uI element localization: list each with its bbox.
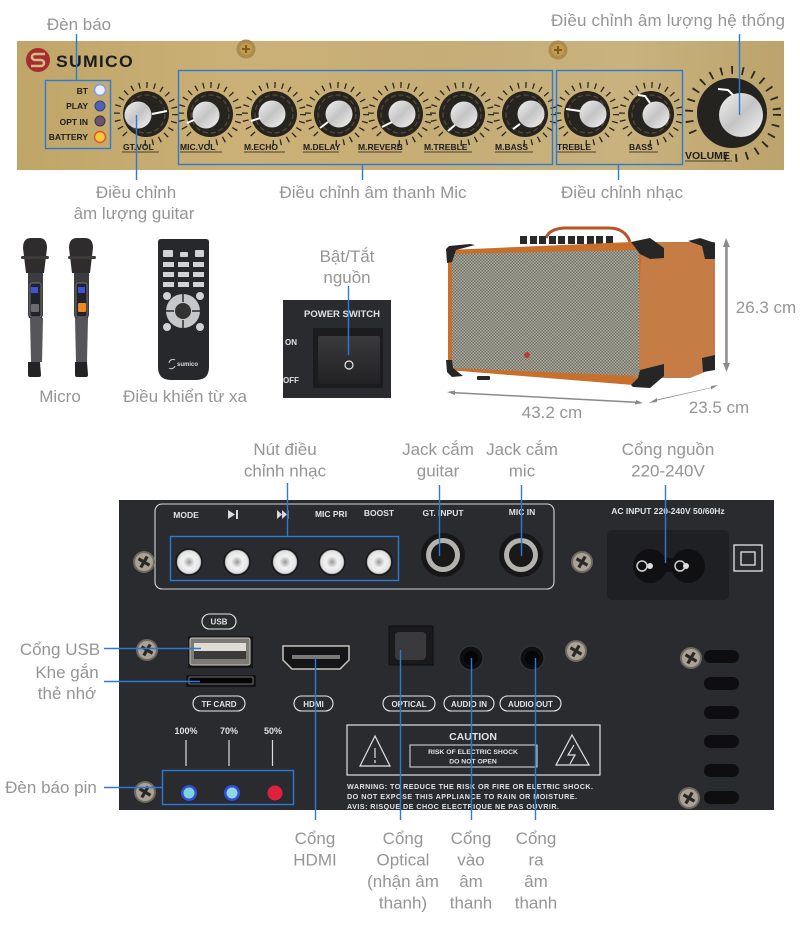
label: power port: 220-240V	[631, 462, 706, 480]
HDMI tag	[294, 696, 333, 711]
knob: GT.VOL: GT.VOL	[123, 142, 154, 152]
caution box	[347, 725, 600, 775]
label: optical: thanh)	[379, 894, 427, 912]
image: remote control	[158, 239, 209, 380]
jack: mic input	[499, 533, 543, 577]
callout lines: rear panel	[104, 483, 666, 820]
label: music: Điều chỉnh nhạc	[561, 183, 683, 202]
knob: BASS	[622, 85, 680, 152]
label: battery lights: Đèn báo pin	[5, 778, 97, 797]
TF CARD tag: TF CARD	[201, 700, 237, 709]
label: guitar jack: guitar	[417, 462, 460, 480]
indicator lights: BATTERY	[49, 132, 88, 142]
label: optical: (nhận âm	[367, 872, 439, 891]
callout boxes: top strip	[46, 34, 740, 180]
knob: TREBLE	[557, 85, 616, 152]
label: music buttons: chỉnh nhạc	[244, 462, 327, 480]
image: power switch: OFF	[283, 376, 299, 385]
label: audio out: Cổng	[516, 829, 556, 848]
panel: top control strip	[17, 40, 784, 170]
label: USB port: Cổng USB	[20, 640, 100, 659]
input labels: MODE	[173, 510, 199, 520]
dimension arrows	[447, 238, 730, 404]
battery levels: 50%	[264, 726, 282, 736]
label: depth: 23.5 cm	[689, 398, 749, 417]
label: height: 26.3 cm	[736, 298, 796, 317]
label: micro: Micro	[39, 387, 81, 406]
warning text: WARNING: TO REDUCE THE RISK OR FIRE OR ELETRIC SHOCK.	[347, 782, 593, 791]
label: audio out: thanh	[515, 894, 557, 912]
indicator lights: PLAY	[66, 101, 88, 111]
battery levels	[174, 726, 282, 801]
knob: M.TREBLE	[424, 85, 491, 152]
knob: BASS: BASS	[629, 142, 653, 152]
screws	[133, 551, 702, 809]
label: mic sound: Điều chỉnh âm thanh Mic	[279, 183, 467, 202]
caution box: RISK OF ELECTRIC SHOCK	[428, 749, 518, 756]
buttons	[176, 549, 392, 575]
input labels: MIC IN	[509, 507, 535, 517]
TF CARD tag	[193, 696, 245, 711]
battery levels: 70%	[220, 726, 238, 736]
indicator lights: BT	[77, 86, 89, 96]
image: microphones	[21, 238, 96, 377]
label: audio out: âm	[524, 872, 548, 891]
warning text: AVIS: RISQUE DE CHOC ELECTRIQUE NE PAS OUVRIR.	[347, 802, 559, 811]
image: orange speaker	[446, 228, 715, 388]
knob: VOLUME: VOLUME	[685, 150, 730, 162]
label: memory card slot: Khe gắn	[35, 663, 99, 682]
knob: M.TREBLE: M.TREBLE	[424, 142, 468, 152]
AUDIO OUT tag: AUDIO OUT	[508, 700, 553, 709]
caution box: CAUTION	[449, 731, 497, 743]
optical port	[389, 626, 433, 665]
label: music buttons: Nút điều	[253, 440, 317, 459]
label: indicator lights: Đèn báo	[47, 15, 111, 34]
image: power switch: POWER SWITCH	[304, 309, 380, 320]
knob: VOLUME	[685, 70, 777, 162]
knob: MIC.VOL: MIC.VOL	[180, 142, 215, 152]
label: audio out: ra	[528, 850, 544, 870]
label: HDMI: Cổng	[295, 829, 335, 848]
label: guitar volume: âm lượng guitar	[74, 204, 195, 223]
logo: Sumico	[26, 48, 134, 72]
label: audio in: vào	[457, 850, 485, 870]
label: power port: Cổng nguồn	[622, 440, 714, 459]
knob: M.DELAY	[303, 85, 366, 152]
label: optical: Optical	[377, 850, 429, 870]
label: system volume: Điều chỉnh âm lượng hệ thống	[551, 11, 785, 30]
caution box: DO NOT OPEN	[449, 758, 497, 766]
knob: M.BASS	[495, 85, 554, 152]
input labels: MIC PRI	[315, 509, 347, 519]
image: remote control: sumico	[177, 362, 198, 368]
OPTICAL tag: OPTICAL	[391, 700, 427, 709]
knob: M.REVERB: M.REVERB	[358, 142, 403, 152]
image: power switch: ON	[285, 338, 297, 347]
input labels: AC INPUT 220-240V 50/60Hz	[611, 506, 725, 516]
knob: M.ECHO	[244, 85, 303, 152]
audio out jack	[520, 646, 544, 670]
knob: GT.VOL	[117, 85, 175, 152]
label: audio in: Cổng	[451, 829, 491, 848]
USB tag: USB	[211, 618, 228, 626]
label: optical: Cổng	[383, 829, 423, 848]
battery levels: 100%	[174, 726, 198, 736]
power socket	[607, 530, 729, 600]
image: power switch	[283, 300, 391, 398]
label: guitar volume: Điều chỉnh	[96, 183, 176, 202]
AUDIO OUT tag	[500, 696, 561, 711]
indicator lights	[49, 84, 106, 142]
USB port	[188, 636, 253, 668]
knob: M.REVERB	[358, 85, 429, 152]
label: guitar jack: Jack cắm	[402, 440, 474, 459]
audio in jack	[459, 646, 483, 670]
input labels: GT. INPUT	[422, 508, 464, 518]
knob: M.ECHO: M.ECHO	[244, 142, 278, 152]
label: width: 43.2 cm	[522, 403, 582, 422]
warning text: DO NOT EXPOSE THIS APPLIANCE TO RAIN OR MOISTURE.	[347, 792, 577, 801]
label: memory card slot: thẻ nhớ	[38, 684, 96, 703]
AUDIO IN tag: AUDIO IN	[451, 700, 487, 709]
input labels	[173, 506, 725, 520]
vents	[704, 650, 739, 804]
label: audio in: âm	[459, 872, 483, 891]
AUDIO IN tag	[444, 696, 494, 711]
label: power: Bật/Tắt	[320, 247, 375, 266]
OPTICAL tag	[383, 696, 435, 711]
panel: rear panel	[119, 500, 774, 811]
input group outline	[155, 504, 554, 589]
label: power: nguồn	[323, 268, 371, 287]
warning text	[347, 782, 593, 811]
double insulation symbol	[734, 545, 762, 571]
label: HDMI: HDMI	[293, 850, 337, 870]
knob: M.DELAY: M.DELAY	[303, 142, 341, 152]
input labels: BOOST	[364, 508, 395, 518]
label: remote control: Điều khiển từ xa	[123, 387, 247, 406]
label: mic jack: mic	[509, 462, 536, 480]
label: audio in: thanh	[450, 894, 492, 912]
jack: guitar input	[421, 533, 465, 577]
label: mic jack: Jack cắm	[486, 440, 558, 459]
knob: MIC.VOL	[180, 85, 239, 152]
knob: TREBLE: TREBLE	[557, 142, 591, 152]
HDMI tag: HDMI	[303, 700, 324, 709]
TF card slot	[186, 675, 256, 687]
pointer: power	[348, 286, 350, 355]
USB tag	[202, 614, 236, 629]
logo: Sumico: SUMICO	[56, 52, 134, 71]
knob: M.BASS: M.BASS	[495, 142, 528, 152]
indicator lights: OPT IN	[60, 117, 88, 127]
HDMI port	[283, 646, 349, 669]
